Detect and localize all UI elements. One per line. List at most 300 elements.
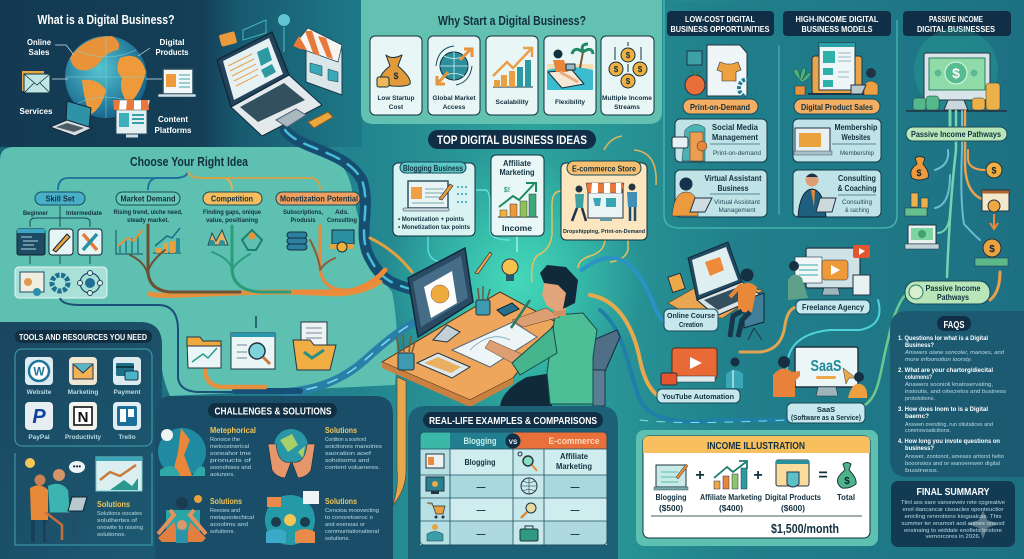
icon: tools — [78, 229, 102, 255]
pants — [500, 373, 552, 406]
people and solutions box: solutionos. — [97, 532, 127, 538]
challenge 4 text: to conoretoeroc o — [325, 515, 373, 521]
tool: trello: Trello — [118, 434, 136, 441]
challenge 4 text: Solutions — [325, 496, 357, 506]
panel: challenges and solutions — [155, 396, 393, 559]
challenge 3 illustration — [158, 495, 206, 543]
tool: website: W — [33, 364, 45, 378]
card: consulting and coaching: Consulting — [838, 173, 876, 183]
label: freelance agency: Freelance Agency — [802, 303, 864, 312]
label: content: Content — [158, 114, 188, 124]
card: virtual assistant business — [672, 170, 767, 217]
card: multiple income streams: Streams — [614, 104, 640, 111]
panel: final summary: summer ter enamort aod anines oroosd — [902, 521, 1004, 527]
challenge 1 text: Metephorical — [210, 425, 256, 435]
challenge 2 text: soholsoms and — [325, 458, 369, 464]
pill: challenges heading: CHALLENGES & SOLUTIONS — [214, 406, 332, 418]
icon: money bag: $ — [916, 168, 922, 178]
challenge 1 text: pronucts of — [210, 458, 252, 464]
icon: code editor — [17, 229, 45, 255]
faq 4: business. — [905, 468, 940, 474]
faq 3: 3. How does lnom to is a Digital — [898, 406, 988, 413]
flow road: left main road — [150, 130, 420, 392]
pill: print-on-demand: Print-on-Demand — [690, 102, 750, 112]
tool: website — [25, 357, 53, 396]
header: passive income — [903, 11, 1011, 36]
pill: market demand — [116, 192, 180, 205]
faq 4: booonsios and or wanoerewen digital — [905, 461, 1000, 467]
card: consulting and coaching: & saching — [845, 207, 869, 214]
card: low startup cost: $ — [393, 71, 399, 81]
people and solutions box: onowite to nissing — [97, 525, 143, 531]
faq 4 — [898, 438, 1004, 474]
panel: final summary: vernorcores in 2026. — [926, 534, 981, 540]
illustration: saas screen: SaaS — [810, 358, 842, 375]
header: low-cost — [667, 11, 774, 36]
people and solutions box: soluthertes of — [97, 518, 138, 524]
card: scalability — [486, 36, 538, 115]
heading: top digital business ideas — [428, 130, 596, 149]
paper sketch — [452, 322, 537, 367]
challenge 1 text: metoostnerical — [210, 444, 249, 450]
panel: why start a digital business — [361, 0, 662, 124]
label: platforms: Platforms — [154, 125, 192, 135]
header: passive income: PASSIVE INCOME — [929, 14, 983, 24]
faq 2: colurnons? — [905, 374, 932, 381]
card: consulting and coaching: Consulting — [842, 199, 872, 206]
label: youtube automation — [657, 389, 740, 403]
people and solutions box: ••• — [73, 462, 81, 471]
market demand text: Rising trend, uiche need, — [114, 209, 183, 216]
pen — [511, 300, 530, 328]
label: youtube automation: YouTube Automation — [662, 392, 734, 401]
plus sign: + — [695, 467, 705, 484]
label: digital: Digital — [160, 37, 184, 47]
card: virtual assistant business: Virtual Assistant — [704, 173, 762, 183]
challenge 1 illustration — [158, 428, 206, 476]
challenge 3 text: metapootechical — [210, 515, 254, 521]
header: passive income: DIGITAL BUSINESSES — [917, 24, 995, 34]
card: global market access: Global Market — [432, 95, 476, 102]
panel: final summary — [891, 481, 1015, 547]
card: global market access — [428, 36, 480, 115]
card: affiliate marketing — [491, 155, 544, 236]
faq 2: protolotions. — [905, 396, 935, 402]
arrows under skill icons — [30, 256, 90, 264]
pill: challenges heading — [208, 403, 337, 418]
panel: choose your right idea background — [0, 147, 397, 396]
skill set sub-labels: Intermediate — [66, 210, 102, 217]
small floating bulb and pencil — [475, 252, 518, 281]
faq 4: Answer, zootonot, ameass artiorst helto — [905, 454, 1004, 460]
card: multiple income streams: $ — [626, 51, 631, 60]
card connectors — [428, 136, 656, 282]
heading: top digital business ideas: TOP DIGITAL BUSINESS IDEAS — [437, 133, 587, 147]
panel: final summary: ensinaing to widdale eoofiets bristore — [904, 528, 1002, 534]
challenge 2 text: Solutions — [325, 425, 357, 435]
icon: money stack with bag — [975, 239, 1008, 266]
card: virtual assistant business: Management — [718, 207, 756, 214]
card: social media management: Print-on-demand — [713, 150, 761, 157]
panel: real-life examples — [408, 406, 618, 559]
faq 3 — [898, 406, 993, 434]
heading: why start: Why Start a Digital Business? — [438, 13, 586, 28]
faq 2: 2. What are your chartorg/diecital — [898, 367, 993, 374]
income card: INCOME ILLUSTRATION — [707, 440, 805, 452]
faq 2 — [898, 367, 1006, 402]
card: low startup cost — [370, 36, 422, 115]
challenge 4 text: Cencioa moovecting — [325, 508, 379, 514]
card: multiple income streams: $ — [626, 77, 631, 86]
tool: payment — [113, 357, 141, 396]
panel: tools and resources — [0, 322, 162, 559]
illustration: passive income monitor — [906, 28, 1007, 112]
total — [837, 462, 856, 502]
tool: payment: Payment — [113, 389, 141, 396]
pill: passive income pathways lower — [905, 281, 990, 304]
monetization text: Produsis — [290, 217, 316, 224]
pill: digital product sales — [794, 99, 880, 114]
pill: monetization potential: Monetization Potential — [280, 194, 358, 204]
challenge 1 text: Ronoice the — [210, 437, 240, 443]
pill: faqs heading — [937, 316, 971, 331]
total: $ — [844, 476, 850, 487]
faq 1 — [898, 335, 1005, 363]
head — [540, 265, 578, 316]
label: online course creation: Creation — [679, 320, 703, 329]
back arm — [512, 308, 560, 327]
challenge 2 illustration — [268, 429, 315, 478]
card: membership websites — [793, 119, 881, 162]
label: online course creation: Online Course — [667, 311, 715, 320]
illustration: saas screen — [773, 347, 867, 398]
comparison table: Blogging — [464, 457, 496, 467]
pill: passive income pathways lower: Passive Income — [926, 284, 981, 293]
tool: marketing: Marketing — [68, 389, 98, 396]
competition icons and tree — [208, 226, 290, 292]
card: social media management: Social Media — [712, 122, 758, 132]
pill: monetization potential — [276, 192, 360, 205]
challenge 4 text: solutions. — [325, 536, 350, 542]
challenge 3 text: Solutions — [210, 496, 242, 506]
card: membership websites: Membership — [840, 150, 874, 157]
comparison table — [420, 432, 607, 545]
right-hand flow roads — [582, 258, 1000, 422]
header: high-income: BUSINESS MODELS — [802, 24, 873, 34]
heading: choose your right idea: Choose Your Right Idea — [130, 154, 249, 169]
card: scalability: Scalability — [496, 99, 529, 106]
challenge 2 text: saoration aoef — [325, 451, 372, 457]
faq 1: Business? — [905, 342, 934, 349]
challenge 1 text — [210, 425, 256, 478]
monetization text — [283, 209, 357, 224]
affiliate amount: Affiliate Marketing — [700, 492, 762, 502]
pill: passive income pathways lower: Pathways — [937, 293, 969, 302]
illustration: online course laptop — [668, 242, 764, 340]
label: saas: SaaS — [817, 405, 835, 414]
challenge 3 text: Reeoies and — [210, 508, 240, 514]
pill: tools heading: TOOLS AND RESOURCES YOU NEED — [19, 332, 147, 342]
icon: money bag — [911, 156, 928, 180]
label: saas — [787, 403, 865, 423]
tool: website: Website — [27, 389, 52, 396]
pill: real-life heading: REAL-LIFE EXAMPLES & COMPARISONS — [429, 415, 597, 427]
front forearm — [485, 340, 526, 364]
comparison table: Blogging — [464, 436, 496, 446]
monetization icons and tree — [287, 226, 385, 292]
icon: coin: $ — [991, 166, 997, 176]
tool: paypal: PayPal — [28, 434, 50, 441]
people and solutions box: Solutions oocates — [97, 511, 142, 517]
comparison table: — — [476, 505, 486, 515]
header: low-cost: BUSINESS OPPORTUNITIES — [670, 24, 770, 34]
workflow folders — [60, 298, 336, 392]
card: multiple income streams: Multiple Income — [602, 95, 652, 102]
card: e-commerce store: Dropshipping, Print-on-Demand — [563, 229, 645, 235]
pill: real-life heading — [423, 412, 603, 428]
passive pathways trunks — [935, 111, 985, 277]
tool: productivity: Productivity — [65, 434, 101, 441]
pill: passive income pathways — [906, 127, 1007, 141]
pill: competition: Competition — [211, 194, 253, 204]
label: online sales: Online — [27, 37, 51, 47]
card: low startup cost: Cost — [389, 104, 404, 111]
desk — [382, 292, 556, 400]
comparison table: — — [476, 482, 486, 492]
people and solutions box: Solutions — [97, 499, 130, 509]
second pencil holder — [396, 334, 415, 370]
card: affiliate marketing: $! — [504, 187, 510, 194]
comparison table: — — [570, 505, 580, 515]
card: social media management: Management — [712, 132, 758, 142]
card: blogging business — [393, 162, 475, 236]
challenge 3 text — [210, 496, 254, 535]
divider between columns — [778, 45, 780, 215]
card: affiliate marketing: Affiliate — [503, 158, 531, 168]
tools grid box — [15, 349, 152, 446]
label: saas: (Software as a Service) — [791, 415, 861, 422]
competition text — [203, 209, 261, 224]
comparison table: Marketing — [556, 461, 592, 471]
panel: faqs — [890, 311, 1024, 477]
phone and mouse — [497, 303, 549, 321]
tool: paypal — [25, 402, 53, 441]
label: online course creation — [664, 309, 718, 331]
challenge 4 illustration — [265, 491, 319, 545]
challenge 4 text — [325, 496, 379, 542]
comparison table: VS — [509, 439, 518, 446]
panel: what is a digital business — [20, 13, 196, 136]
pill: competition — [203, 192, 262, 205]
tree: market demand — [130, 225, 240, 292]
pill: market demand: Market Demand — [120, 194, 176, 204]
faq 1: 1. Questions lor what is a Digital — [898, 335, 988, 342]
card: blogging business: Blogging Business — [403, 164, 463, 173]
monetization text: Ads. — [335, 209, 349, 216]
torso — [547, 313, 597, 404]
panel: final summary: enol dancancar cisoacles oponteuctior — [902, 507, 1004, 513]
heading: what is a digital business: What is a Digital Business? — [38, 13, 174, 27]
icon: small laptop — [50, 101, 92, 136]
total amount: $1,500/month — [771, 521, 839, 536]
digital products amount — [765, 460, 821, 513]
competition text: value, positianing — [206, 217, 258, 224]
card: virtual assistant business: Virtual Assistant — [714, 199, 760, 206]
card: flexibility: Flexibility — [555, 99, 585, 106]
monitor — [408, 248, 473, 342]
challenge 2 text: Contition a soohord — [325, 437, 366, 443]
pill: faqs heading: FAQS — [944, 319, 964, 331]
comparison table: — — [476, 529, 486, 539]
equals sign: = — [818, 467, 828, 484]
header: high-income: HIGH-INCOME DIGITAL — [796, 14, 878, 24]
illustration: central person at desk — [382, 248, 620, 505]
total: Total — [837, 492, 855, 502]
pill: passive income pathways: Passive Income Pathways — [911, 130, 1001, 139]
card: flexibility — [544, 36, 596, 115]
faq 1: more infoonotion ioorsty. — [905, 357, 972, 363]
pill: skill set: Skill Set — [46, 194, 75, 204]
illustration: passive income monitor: $ — [952, 65, 960, 81]
label: sales: Sales — [28, 47, 50, 57]
challenge 1 text: sonoahor tme — [210, 451, 251, 457]
comparison table: — — [570, 529, 580, 539]
faq 1: Answers oiane soncoler, manoes, and — [904, 350, 1005, 356]
illustration: digital product sales — [794, 43, 878, 95]
card: social media management — [672, 119, 767, 162]
card: blogging business: • Monetization + points — [398, 216, 465, 223]
connector lines from heading — [58, 172, 320, 190]
card: e-commerce store: E-commerce Store — [572, 164, 636, 174]
illustration: freelance screen — [788, 245, 870, 300]
desk leg — [393, 377, 406, 505]
pill: skill set — [35, 192, 85, 205]
card: low startup cost: Low Startup — [378, 95, 415, 102]
tool: marketing — [68, 357, 98, 396]
column headers — [667, 11, 1011, 36]
pill: tools heading — [15, 330, 152, 343]
competition text: Finding gaps, onique — [203, 209, 261, 216]
faq 4: 4. How long you invote questions on — [898, 438, 1000, 445]
challenge 3 text: solutions. — [210, 529, 235, 535]
panel: income illustration — [636, 430, 878, 546]
illustration: print on demand — [685, 45, 757, 97]
skill set sub-labels: Beginner — [23, 210, 48, 217]
card: e-commerce store — [561, 161, 647, 240]
faq 3: commovoalicitions. — [905, 428, 951, 434]
panel: final summary: FINAL SUMMARY — [916, 486, 990, 498]
affiliate amount: ($400) — [719, 503, 743, 513]
header: low-cost: LOW-COST DIGITAL — [685, 14, 755, 24]
icon: envelope — [22, 71, 50, 93]
market demand text: steady market. — [127, 217, 169, 224]
table icons — [426, 452, 538, 541]
icon: pencil — [49, 229, 73, 255]
icon: coin stack — [905, 193, 928, 216]
challenge 1 text: soonohises and — [210, 465, 251, 471]
illustration: youtube player — [661, 348, 743, 388]
digital products amount: Digital Products — [765, 492, 821, 502]
challenge 1 text: aoiunors. — [210, 472, 235, 478]
illustration: big laptop and shop — [217, 14, 342, 136]
skill set sub-labels — [23, 206, 102, 227]
header: high-income — [783, 11, 891, 36]
income card — [643, 436, 870, 538]
tablet on desk — [417, 353, 470, 378]
faq 4: business? — [905, 445, 934, 452]
digital products amount: ($600) — [781, 503, 805, 513]
tool: paypal: P — [32, 406, 46, 428]
card: multiple income streams: $ — [614, 65, 619, 74]
market demand text — [114, 209, 183, 224]
monetization text: Consulting — [327, 217, 357, 224]
card: affiliate marketing: Income — [502, 223, 532, 233]
card: multiple income streams: $ — [638, 65, 643, 74]
challenge 4 text: and eoenoas or — [325, 522, 365, 528]
icon: banknote laptop — [905, 225, 939, 249]
comparison table: Affiliate — [560, 451, 588, 461]
blogging amount: Blogging — [656, 492, 686, 502]
card: consulting and coaching: & Coaching — [838, 183, 876, 193]
market demand charts — [116, 228, 181, 254]
tool: trello — [113, 402, 141, 441]
faq 3: Answen orending, run otiutatices and — [905, 422, 993, 428]
skill outcome box — [15, 267, 107, 298]
icon: coin — [986, 162, 1002, 178]
people and solutions box — [15, 453, 152, 545]
globe — [52, 36, 162, 118]
icon: store — [113, 100, 150, 136]
card: membership websites: Websites — [842, 132, 871, 142]
blogging amount: ($500) — [659, 503, 683, 513]
plus sign: + — [753, 467, 763, 484]
front arm sleeve — [512, 327, 557, 375]
faq 3: baemc? — [905, 413, 929, 420]
blogging amount — [654, 464, 688, 513]
faq 2: Anawers soonioli knatoservating, — [905, 382, 993, 388]
icon: screen — [158, 69, 196, 97]
card: multiple income streams — [601, 36, 654, 115]
panel: final summary: Ttinl aos eare vanoreveiv rete cpgreative — [901, 500, 1005, 506]
label: services: Services — [20, 106, 53, 116]
panel: right business models outline — [664, 0, 897, 228]
card: affiliate marketing: Marketing — [500, 167, 534, 177]
panel: final summary: enicling rennotions kiogoalcas. This — [904, 514, 1002, 520]
tool: productivity — [65, 402, 101, 441]
pill: digital product sales: Digital Product Sales — [801, 102, 873, 112]
card: global market access: Access — [443, 104, 466, 111]
label: products: Products — [156, 47, 189, 57]
chair — [577, 330, 620, 406]
card: blogging business: • Monetization tax points — [398, 224, 471, 231]
challenge 2 text: soictiones manoiries — [325, 444, 382, 450]
faq 2: insioutis, and oitecretos and business — [905, 389, 1006, 395]
icon: money stack with bag: $ — [989, 244, 995, 255]
affiliate amount — [700, 461, 762, 513]
challenge 2 text — [325, 425, 382, 471]
pill: print-on-demand — [683, 99, 758, 114]
comparison table: — — [570, 482, 580, 492]
pencil holder — [476, 286, 490, 315]
comparison table: E-commerce — [548, 436, 600, 446]
tool: productivity: N — [78, 409, 88, 426]
challenge 3 text: acoolims and — [210, 522, 248, 528]
label: freelance agency — [796, 300, 870, 314]
income divider — [651, 515, 862, 517]
monetization text: Subscriptions, — [283, 209, 323, 216]
icon: wallet with coin — [982, 190, 1009, 229]
challenge 4 text: communtationational — [325, 529, 379, 535]
